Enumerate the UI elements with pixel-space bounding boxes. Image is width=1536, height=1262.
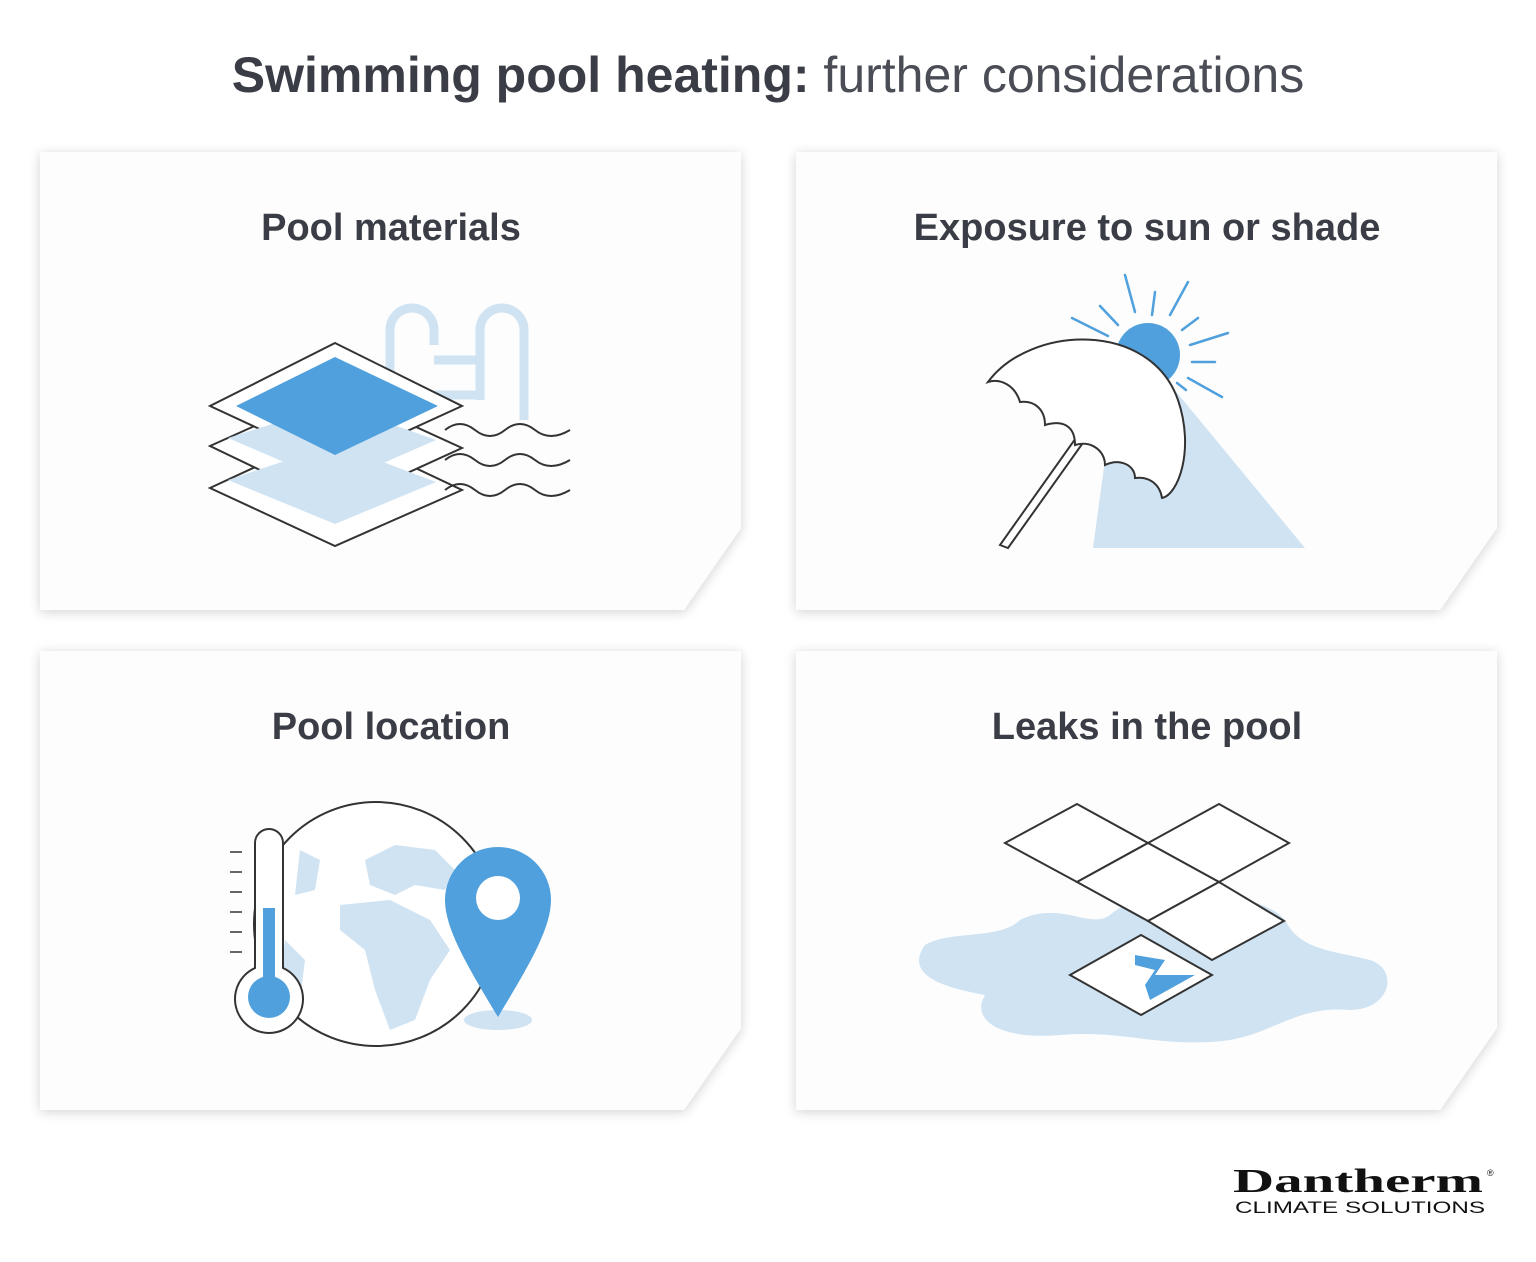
icon: globe thermometer pin <box>230 802 551 1046</box>
logo: CLIMATE SOLUTIONS <box>1235 1198 1485 1217</box>
panel: sun or shade <box>796 152 1497 610</box>
logo: ® <box>1487 1168 1494 1178</box>
title: Swimming pool heating: further considerations <box>232 47 1304 103</box>
panel: pool materials <box>40 152 741 610</box>
panel: pool location <box>40 651 741 1110</box>
icon: cracked tiles puddle <box>919 804 1387 1042</box>
logo: Dantherm <box>1233 1163 1483 1200</box>
icon: umbrella and sun <box>988 275 1305 548</box>
heading: pool materials: Pool materials <box>261 207 521 249</box>
icon: pool layers <box>210 308 570 546</box>
logo <box>1233 1163 1494 1217</box>
heading: exposure: Exposure to sun or shade <box>914 207 1380 249</box>
heading: pool location: Pool location <box>272 706 510 748</box>
panel: leaks <box>796 651 1497 1110</box>
heading: leaks: Leaks in the pool <box>992 706 1302 748</box>
